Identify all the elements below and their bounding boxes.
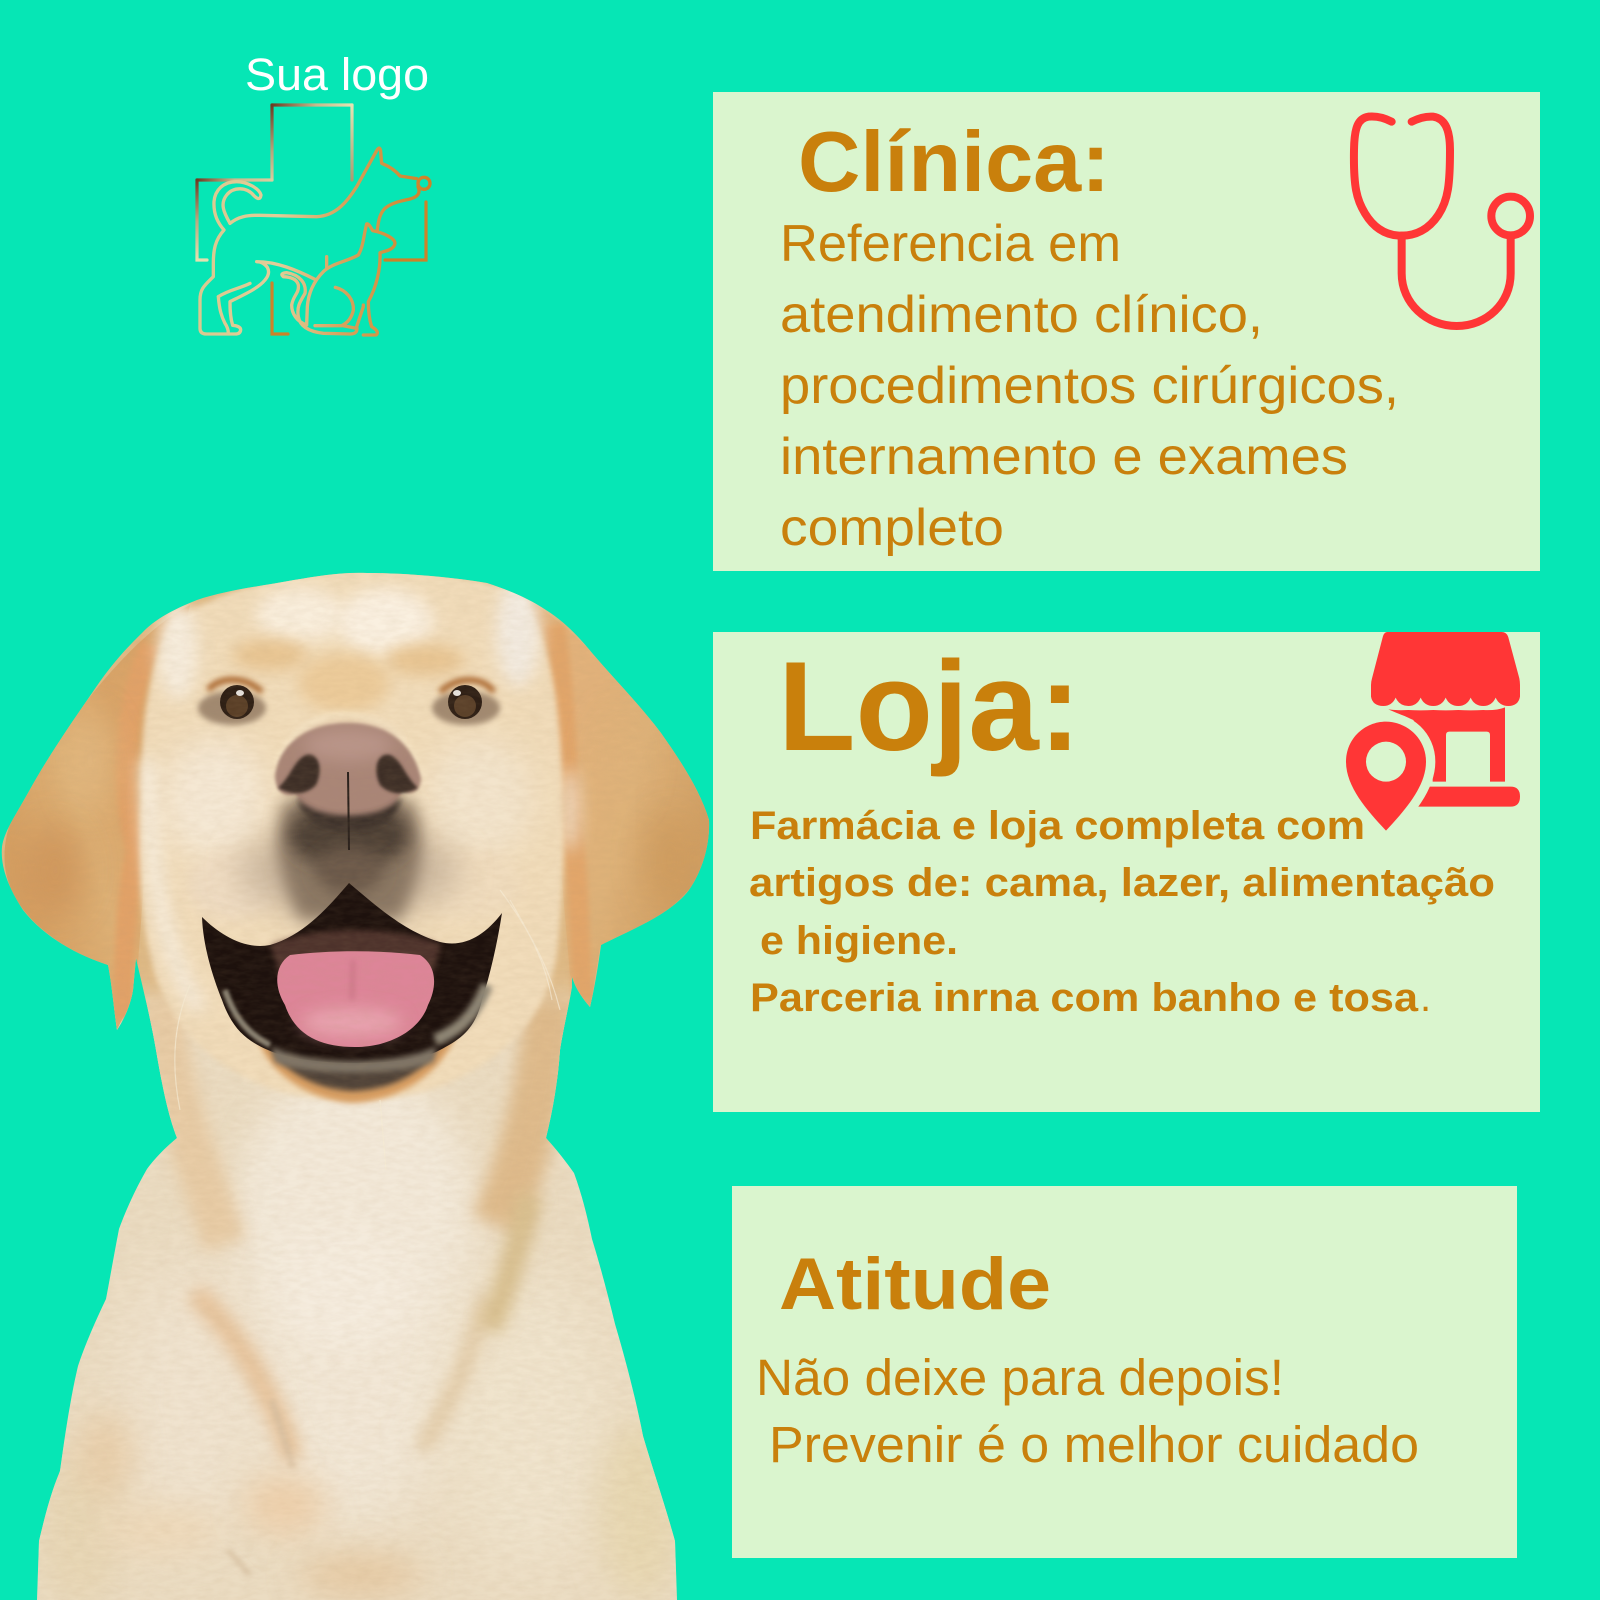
- panel: loja: [713, 632, 1540, 1112]
- clinica heading: Clínica:: [798, 115, 1110, 210]
- dog nose: [275, 723, 421, 850]
- dog fur texture: [74, 586, 627, 1593]
- atitude body text: Não deixe para depois!: [756, 1349, 1284, 1406]
- clinica body text: completo: [780, 499, 1004, 557]
- dog chin: [258, 1035, 456, 1103]
- dog body: [37, 984, 677, 1600]
- dog muzzle: [239, 715, 459, 920]
- dog right ear: [520, 595, 716, 1010]
- logo text: Sua logo: [245, 49, 429, 100]
- clinica background: [713, 92, 1540, 571]
- dog photo illustration: [0, 560, 760, 1600]
- icon: store with location pin: [1346, 632, 1520, 831]
- dog left ear: [4, 605, 190, 1032]
- loja heading: Loja:: [778, 635, 1081, 777]
- dog mouth: [202, 883, 502, 1072]
- loja background: [713, 632, 1540, 1112]
- clinica body text: internamento e exames: [780, 428, 1348, 486]
- clinica body text: atendimento clínico,: [780, 286, 1263, 344]
- icon: stethoscope: [1354, 117, 1530, 326]
- dog eyes: [198, 680, 500, 725]
- dog base fill: [0, 560, 720, 1080]
- loja body text: artigos de: cama, lazer, alimentação: [749, 861, 1495, 905]
- dog whiskers: [174, 890, 560, 1110]
- clinica body text: [780, 215, 1399, 557]
- clinica body text: procedimentos cirúrgicos,: [780, 357, 1399, 415]
- loja body text: e higiene.: [760, 919, 958, 963]
- atitude body text: Prevenir é o melhor cuidado: [769, 1416, 1419, 1473]
- logo dog and cat outline: [200, 148, 430, 335]
- dog tongue: [277, 951, 434, 1047]
- panel: clinica: [713, 92, 1540, 571]
- loja body text: [749, 804, 1495, 1020]
- panel: atitude: [732, 1186, 1517, 1558]
- atitude body text: [756, 1349, 1419, 1473]
- clinica body text: Referencia em: [780, 215, 1121, 273]
- loja body text: Farmácia e loja completa com: [750, 804, 1365, 848]
- loja body text: Parceria inrna com banho e tosa: [750, 976, 1419, 1020]
- dog head: [140, 568, 564, 1100]
- loja body text: .: [1420, 976, 1431, 1020]
- atitude background: [732, 1186, 1517, 1558]
- logo: [197, 49, 430, 335]
- logo cross outline: [197, 105, 426, 334]
- atitude heading: Atitude: [779, 1244, 1051, 1325]
- dog neck and shoulder: [160, 1000, 550, 1350]
